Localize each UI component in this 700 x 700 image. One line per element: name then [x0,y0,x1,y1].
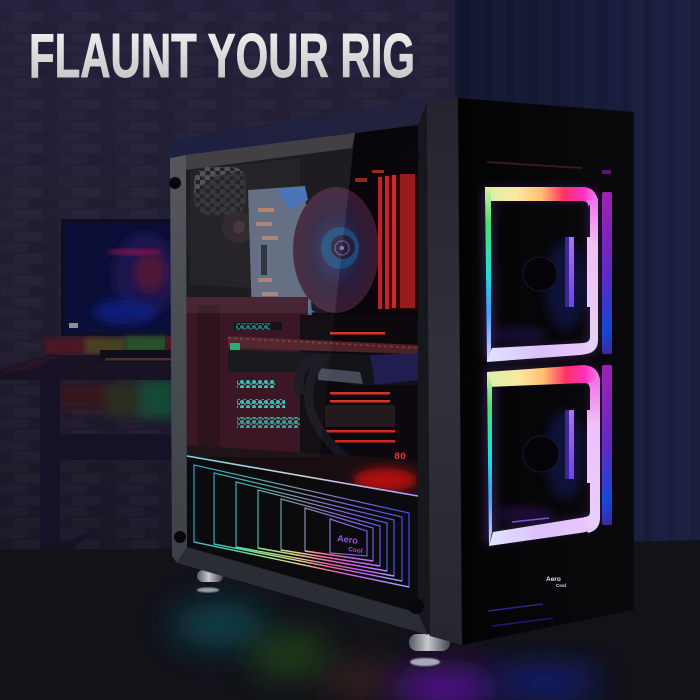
title: FLAUNT YOUR RIG [29,22,415,91]
background: curtain [455,0,700,560]
background: monitor on desk [61,219,181,336]
bottom fan hub and glow [495,410,585,523]
PCI slot vents [237,380,303,428]
infinity mirror rainbow lines [194,542,409,587]
rear fan with honeycomb [183,158,300,290]
bottom RGB fan ring glow [490,374,596,538]
floor [0,540,700,700]
front Aero Cool logo [546,576,566,588]
glass reflection overlay [186,133,355,457]
side RGB strips [602,170,612,525]
glass thumb screws [169,146,424,614]
POST code display: 80 [394,452,406,463]
background: desk with keyboard [0,327,176,552]
RAM modules [355,170,417,310]
case top panel [170,98,430,158]
cooler fan [293,187,379,313]
top RGB fan ring [485,187,598,362]
case feet [197,570,450,651]
background: brick wall [0,0,700,560]
front Aero Cool logo: Cool [556,583,566,588]
infinity mirror frames [194,465,409,587]
front glass panel [458,98,634,645]
case rear rail [418,101,430,636]
bottom RGB fan ring [487,365,600,546]
Aero Cool shroud logo: Aero [337,533,359,546]
front pillar [427,97,462,645]
floor RGB reflection [172,588,600,700]
graphics card [228,336,418,385]
background: rainbow wall glow behind desk [45,336,175,418]
front lower RGB lines [488,604,553,626]
case bottom rail [177,547,428,635]
case side interior [172,124,428,612]
top fan hub and glow [492,237,585,343]
Aero Cool shroud logo: Cool [348,546,363,555]
Aero Cool shroud logo [337,533,363,555]
CPU cooler tower [248,186,315,318]
power cables [299,359,360,470]
front Aero Cool logo: Aero [546,576,561,583]
motherboard [300,315,418,470]
PC case [169,97,634,651]
shroud light edge [187,456,418,496]
top RGB fan ring glow [488,194,594,356]
shroud floor and red glow [187,445,418,496]
front panel top intake hint [487,162,582,168]
PCI bay panel [186,297,308,457]
black PSU shroud [187,456,418,613]
glass frame left [170,155,187,563]
